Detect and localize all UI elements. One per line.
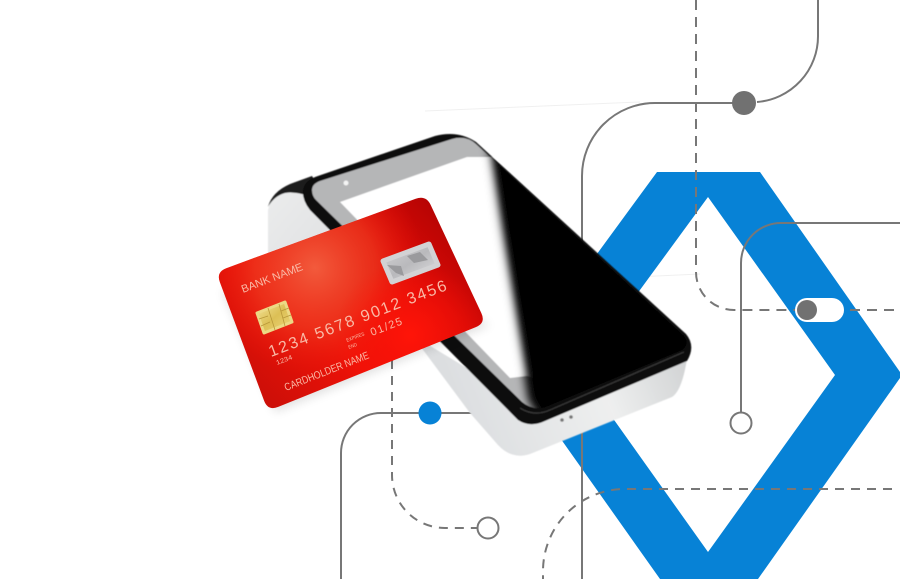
solid line: right side to open circle: [741, 223, 900, 412]
open circle node: right: [730, 412, 752, 434]
faint horizon lines: [425, 102, 700, 284]
end label: END: [348, 342, 358, 351]
card lower glow: [219, 198, 483, 408]
screen lower rim: [520, 352, 684, 413]
small number: 1234: [275, 354, 294, 367]
screen grey reflection: [311, 136, 543, 409]
circuit lines: [341, 0, 900, 579]
screen white reflection: [340, 156, 533, 378]
connector dot: blue: [418, 402, 442, 424]
card number: 1234 5678 9012 3456: [266, 278, 449, 361]
card shadow: [222, 290, 490, 412]
expiry date: 01/25: [369, 316, 404, 339]
terminal lower body: [412, 335, 688, 456]
dashed line: lower vertical to open circle: [392, 360, 477, 528]
solid line: top right to dot: [757, 0, 818, 102]
credit card: [219, 198, 483, 408]
dashed line: upper vertical to toggle: [696, 0, 795, 310]
blue chevron diamond shape: [562, 172, 900, 579]
card body: [219, 198, 483, 408]
solid line: dot to left vertical: [582, 103, 744, 579]
cardholder name: CARDHOLDER NAME: [283, 350, 371, 394]
expires label: EXPIRES: [346, 331, 366, 344]
camera dot: [344, 180, 348, 186]
card highlight: [219, 198, 483, 408]
terminal back dark edge: [268, 176, 330, 207]
solid line: lower left frame: [341, 413, 475, 579]
screen glass: [312, 138, 687, 408]
bank name: BANK NAME: [240, 261, 305, 296]
terminal back body: [268, 178, 340, 262]
dashed line: toggle to right edge: [850, 309, 900, 311]
indicator lights: [560, 415, 573, 422]
payment terminal: [268, 120, 691, 456]
connector dot: grey: [732, 91, 756, 115]
terminal black bezel: [303, 134, 691, 424]
EMV chip: [257, 302, 292, 333]
toggle switch: [795, 298, 844, 322]
dashed line: bottom right curve: [543, 489, 892, 579]
hologram: [383, 244, 438, 282]
open circle node: bottom: [478, 518, 498, 538]
